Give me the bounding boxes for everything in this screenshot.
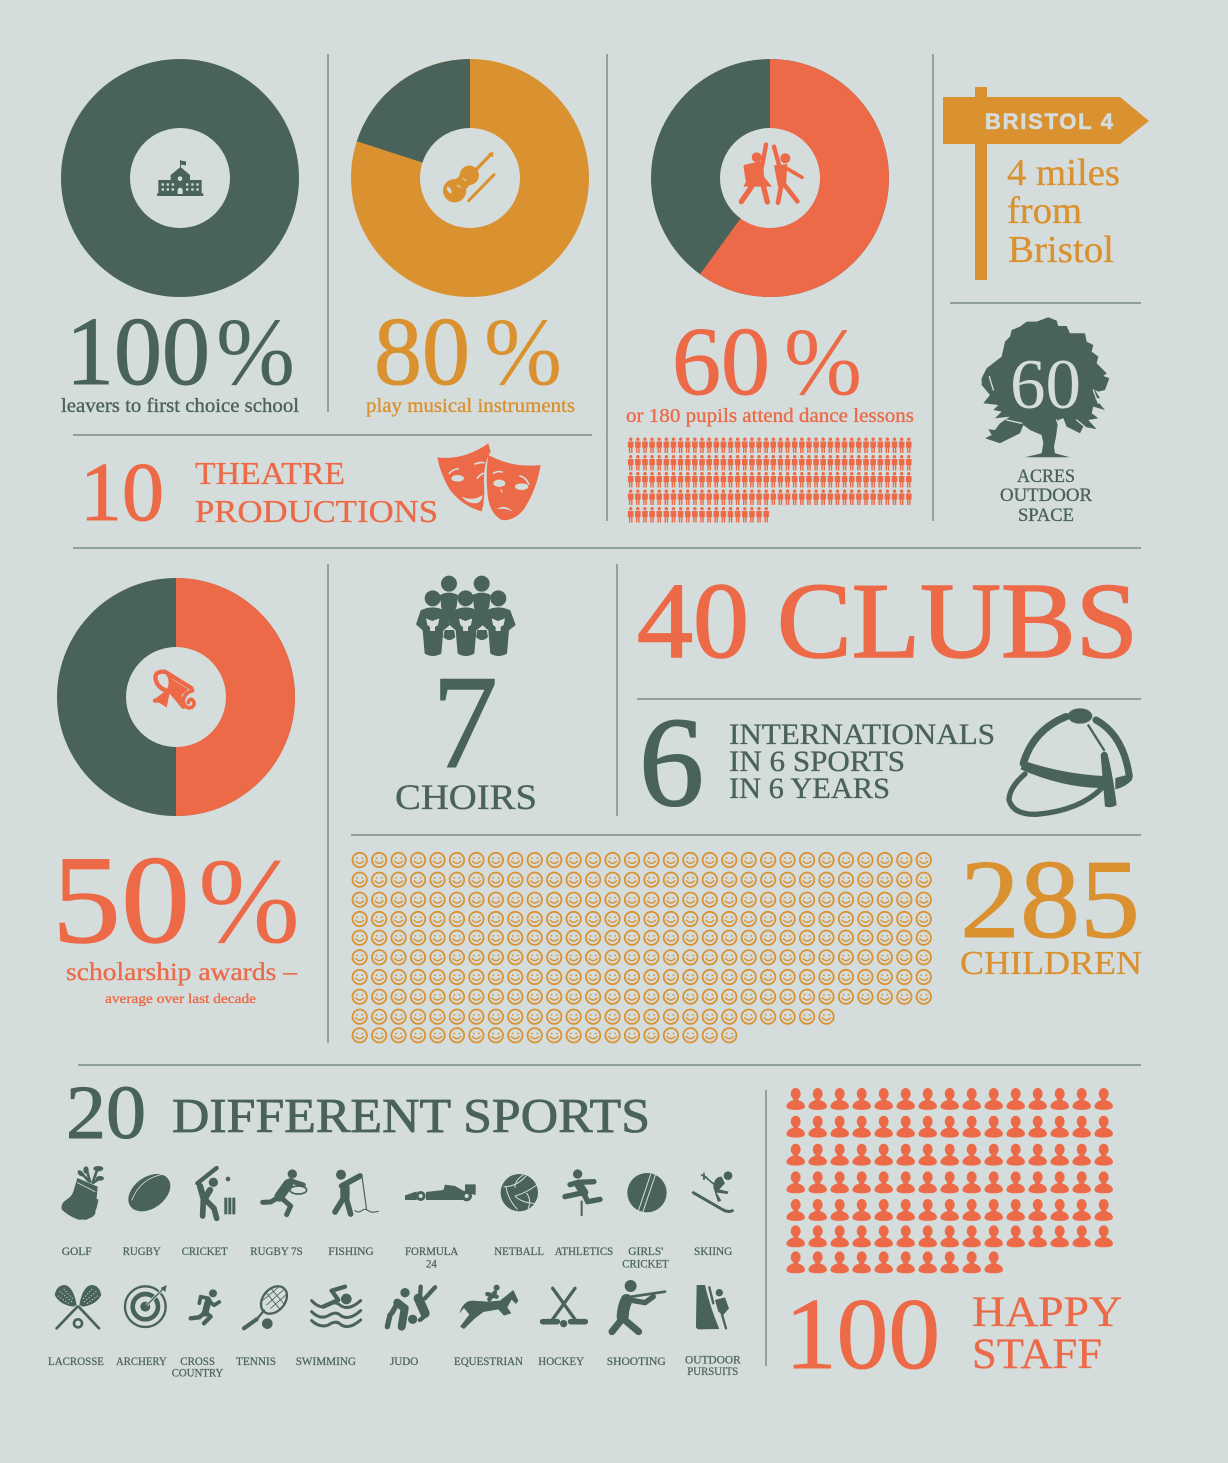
sport labels: RUGBY — [123, 1244, 161, 1258]
donut chart: 100% — [61, 59, 299, 297]
sport labels: FORMULA — [405, 1244, 459, 1258]
icon: girls cricket — [627, 1173, 667, 1212]
sport labels: COUNTRY — [172, 1366, 224, 1380]
panel: 80% play musical instruments — [351, 59, 589, 417]
sport labels: FISHING — [328, 1244, 374, 1258]
icon: tennis — [244, 1281, 292, 1329]
icon: school building — [157, 160, 203, 196]
text: 4 miles from Bristol: 4 miles — [1007, 152, 1120, 194]
icon: judo — [387, 1287, 435, 1327]
label: theatre productions — [195, 455, 438, 529]
stat: 100 happy staff: STAFF — [972, 1331, 1102, 1378]
stat: 60%: % — [784, 308, 862, 415]
icons: sports row two left — [55, 1281, 361, 1329]
pictogram: 100 staff — [786, 1088, 1113, 1273]
panel: 7 choirs — [395, 576, 537, 817]
icon: lacrosse — [55, 1285, 101, 1328]
icon: violin — [443, 152, 494, 202]
icon: theatre masks — [437, 443, 541, 520]
sport labels: 24 — [426, 1256, 437, 1270]
icon: formula 24 — [405, 1184, 476, 1201]
stat: 285 children: CHILDREN — [960, 945, 1142, 982]
text: internationals in 6 sports in 6 years: IN 6 SPORTS — [729, 745, 905, 778]
sport labels: SKIING — [694, 1244, 733, 1258]
stat: 100%: % — [216, 298, 295, 405]
stat: 10: 10 — [80, 446, 164, 539]
sport labels: GIRLS' — [628, 1244, 663, 1258]
stat: 60% — [672, 308, 862, 416]
icons: sports row two right — [387, 1280, 729, 1332]
sport labels: CROSS — [180, 1354, 215, 1368]
icon: golf — [62, 1166, 104, 1220]
caption: acres outdoor space: SPACE — [1018, 505, 1074, 526]
stat: 80% — [374, 298, 562, 406]
text: 4 miles from Bristol: Bristol — [1008, 229, 1114, 271]
stat: 50%: % — [198, 834, 300, 969]
sport labels: TENNIS — [236, 1354, 276, 1368]
icons: sports row one right — [405, 1169, 732, 1216]
text: 4 miles from Bristol — [1007, 152, 1120, 271]
text: 4 miles from Bristol: from — [1007, 190, 1082, 232]
sport labels: LACROSSE — [48, 1354, 104, 1368]
label: theatre productions: PRODUCTIONS — [195, 493, 438, 529]
sport labels — [48, 1244, 741, 1380]
icon: rugby 7s — [263, 1169, 307, 1215]
icon: scroll — [153, 672, 194, 708]
stat: 7: 7 — [432, 648, 498, 796]
icon: choir — [416, 576, 516, 656]
caption: acres outdoor space: OUTDOOR — [1000, 485, 1092, 506]
sport labels: PURSUITS — [687, 1364, 738, 1378]
icon: cross country — [191, 1289, 219, 1323]
stat: 100 happy staff — [785, 1278, 1122, 1391]
sport labels: SHOOTING — [607, 1354, 666, 1368]
sport labels: HOCKEY — [538, 1354, 584, 1368]
panel: 100% leavers to first choice school — [61, 59, 299, 417]
icon: equestrian — [459, 1285, 518, 1329]
text: internationals in 6 sports in 6 years — [729, 718, 995, 805]
label: choirs: CHOIRS — [395, 777, 537, 817]
caption: scholarship awards: scholarship awards – — [66, 959, 298, 986]
stat: 50%: 50 — [52, 831, 190, 970]
pictogram: 180 pupils — [628, 438, 912, 522]
label: theatre productions: THEATRE — [195, 455, 345, 491]
icon: hockey — [543, 1288, 585, 1327]
icon: archery — [125, 1285, 167, 1327]
caption: average over last decade: average over last decade — [105, 992, 256, 1007]
stat: 80%: % — [484, 298, 562, 405]
sport labels: GOLF — [62, 1244, 92, 1258]
stat: 50% — [52, 831, 300, 970]
heading: 40 clubs: 40 CLUBS — [637, 562, 1138, 681]
stat: 6: 6 — [639, 691, 704, 833]
sport labels: EQUESTRIAN — [454, 1354, 523, 1368]
panel: 10 theatre productions — [80, 443, 541, 539]
heading: 20 different sports — [66, 1071, 650, 1155]
caption: leavers: leavers to first choice school — [61, 395, 299, 417]
sport labels: CRICKET — [622, 1256, 669, 1270]
caption: play musical instruments: play musical instruments — [366, 395, 575, 417]
stat: 100% — [66, 298, 295, 406]
icon: signpost: BRISTOL 4 — [985, 109, 1114, 134]
sport labels: ARCHERY — [116, 1354, 167, 1368]
icon: outdoor pursuits — [696, 1285, 729, 1329]
donut chart: 50% — [57, 578, 295, 816]
icon: skiing — [693, 1171, 732, 1212]
heading: 20 different sports: DIFFERENT SPORTS — [172, 1088, 650, 1143]
panel: 6 internationals — [639, 691, 1133, 833]
pictogram: 285 children smileys — [352, 853, 931, 1043]
panel: 4 miles from Bristol — [943, 87, 1149, 280]
stat: 60%: 60 — [672, 308, 770, 416]
text: internationals in 6 sports in 6 years: IN 6 YEARS — [729, 772, 890, 805]
icon: rugby — [121, 1166, 177, 1219]
icon: cricket — [197, 1168, 235, 1218]
stat: 100 happy staff: 100 — [785, 1278, 940, 1391]
heading: 20 different sports: 20 — [66, 1071, 146, 1155]
sport labels: ATHLETICS — [555, 1244, 613, 1258]
stat: 285 children: 285 — [960, 838, 1140, 962]
sport labels: NETBALL — [494, 1244, 544, 1258]
icon: athletics — [565, 1169, 600, 1216]
caption: acres outdoor space: ACRES — [1017, 466, 1075, 487]
stat: 80%: 80 — [374, 298, 470, 406]
icon: tree — [982, 317, 1109, 457]
panel: 60% dance lessons — [626, 59, 914, 522]
icon: dancers — [741, 145, 802, 203]
icon: signpost — [943, 87, 1149, 280]
icon: fishing — [335, 1170, 378, 1214]
panel: 50% scholarship awards — [52, 578, 300, 1007]
icon: netball — [501, 1174, 538, 1211]
text: internationals in 6 sports in 6 years: INTERNATIONALS — [729, 718, 995, 751]
stat: 60: 60 — [1010, 346, 1081, 424]
stat: 100 happy staff: HAPPY — [972, 1289, 1122, 1336]
donut chart: 60% — [651, 59, 889, 297]
sport labels: CRICKET — [182, 1244, 228, 1258]
sport labels: RUGBY 7S — [250, 1244, 303, 1258]
caption: dance pupils: or 180 pupils attend dance lessons — [626, 405, 914, 427]
icon: shooting — [612, 1280, 665, 1332]
sport labels: JUDO — [390, 1354, 419, 1368]
stat: 100%: 100 — [66, 298, 210, 406]
icon: swimming — [312, 1287, 361, 1327]
icons: sports row one left — [62, 1166, 378, 1220]
panel: 60 acres outdoor space — [982, 317, 1109, 526]
caption: acres outdoor space — [1000, 466, 1092, 526]
sport labels: SWIMMING — [296, 1354, 356, 1368]
icon: sports cap — [1009, 708, 1133, 814]
sport labels: OUTDOOR — [685, 1352, 741, 1366]
donut chart: 80% — [351, 59, 589, 297]
